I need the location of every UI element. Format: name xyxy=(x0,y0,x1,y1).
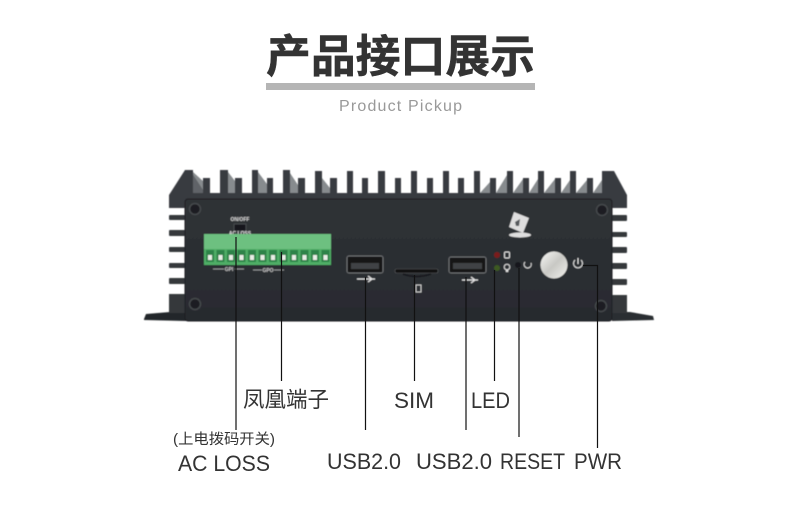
USB port 2 xyxy=(449,257,486,283)
label: PWR: PWR xyxy=(574,449,622,474)
label: phoenix terminal: 凤凰端子 xyxy=(243,388,329,412)
AC LOSS DIP switch xyxy=(229,217,252,237)
top fins xyxy=(180,170,612,194)
AC LOSS DIP switch: ON/OFF xyxy=(231,217,249,223)
label: USB2.0 right: USB2.0 xyxy=(416,449,492,474)
device: fanless box front view xyxy=(144,170,654,321)
title underline bar xyxy=(266,83,535,90)
labels xyxy=(173,388,622,476)
side fins xyxy=(169,215,627,313)
label: LED: LED xyxy=(471,388,510,413)
sloped fin shading xyxy=(193,172,602,193)
terminal GPI / GPO markings: GPO xyxy=(262,268,274,274)
label: USB2.0 left: USB2.0 xyxy=(327,449,401,474)
SIM slot xyxy=(395,269,438,292)
terminal GPI / GPO markings: GPI xyxy=(225,267,234,273)
AC LOSS DIP switch: AC LOSS xyxy=(229,231,252,237)
USB port 1 xyxy=(347,256,383,282)
left mounting foot xyxy=(144,312,186,321)
power button xyxy=(540,252,568,278)
label: power-on DIP note: (上电拨码开关) xyxy=(173,431,275,448)
logo xyxy=(509,212,531,238)
right mounting foot xyxy=(612,312,654,321)
heatsink top body xyxy=(169,170,627,208)
label: SIM: SIM xyxy=(394,388,434,413)
label: RESET: RESET xyxy=(500,449,565,474)
label: AC LOSS: AC LOSS xyxy=(178,451,270,476)
title: 产品接口展示 xyxy=(266,31,535,82)
green phoenix terminal block xyxy=(204,234,331,265)
terminal GPI / GPO markings xyxy=(213,267,284,274)
power icon xyxy=(573,258,582,268)
screws xyxy=(190,204,608,312)
leader lines xyxy=(236,237,598,448)
subtitle: Product Pickup xyxy=(339,98,462,115)
reset hole and icon xyxy=(515,262,531,268)
front plate xyxy=(185,199,612,321)
LED indicators xyxy=(494,252,510,272)
